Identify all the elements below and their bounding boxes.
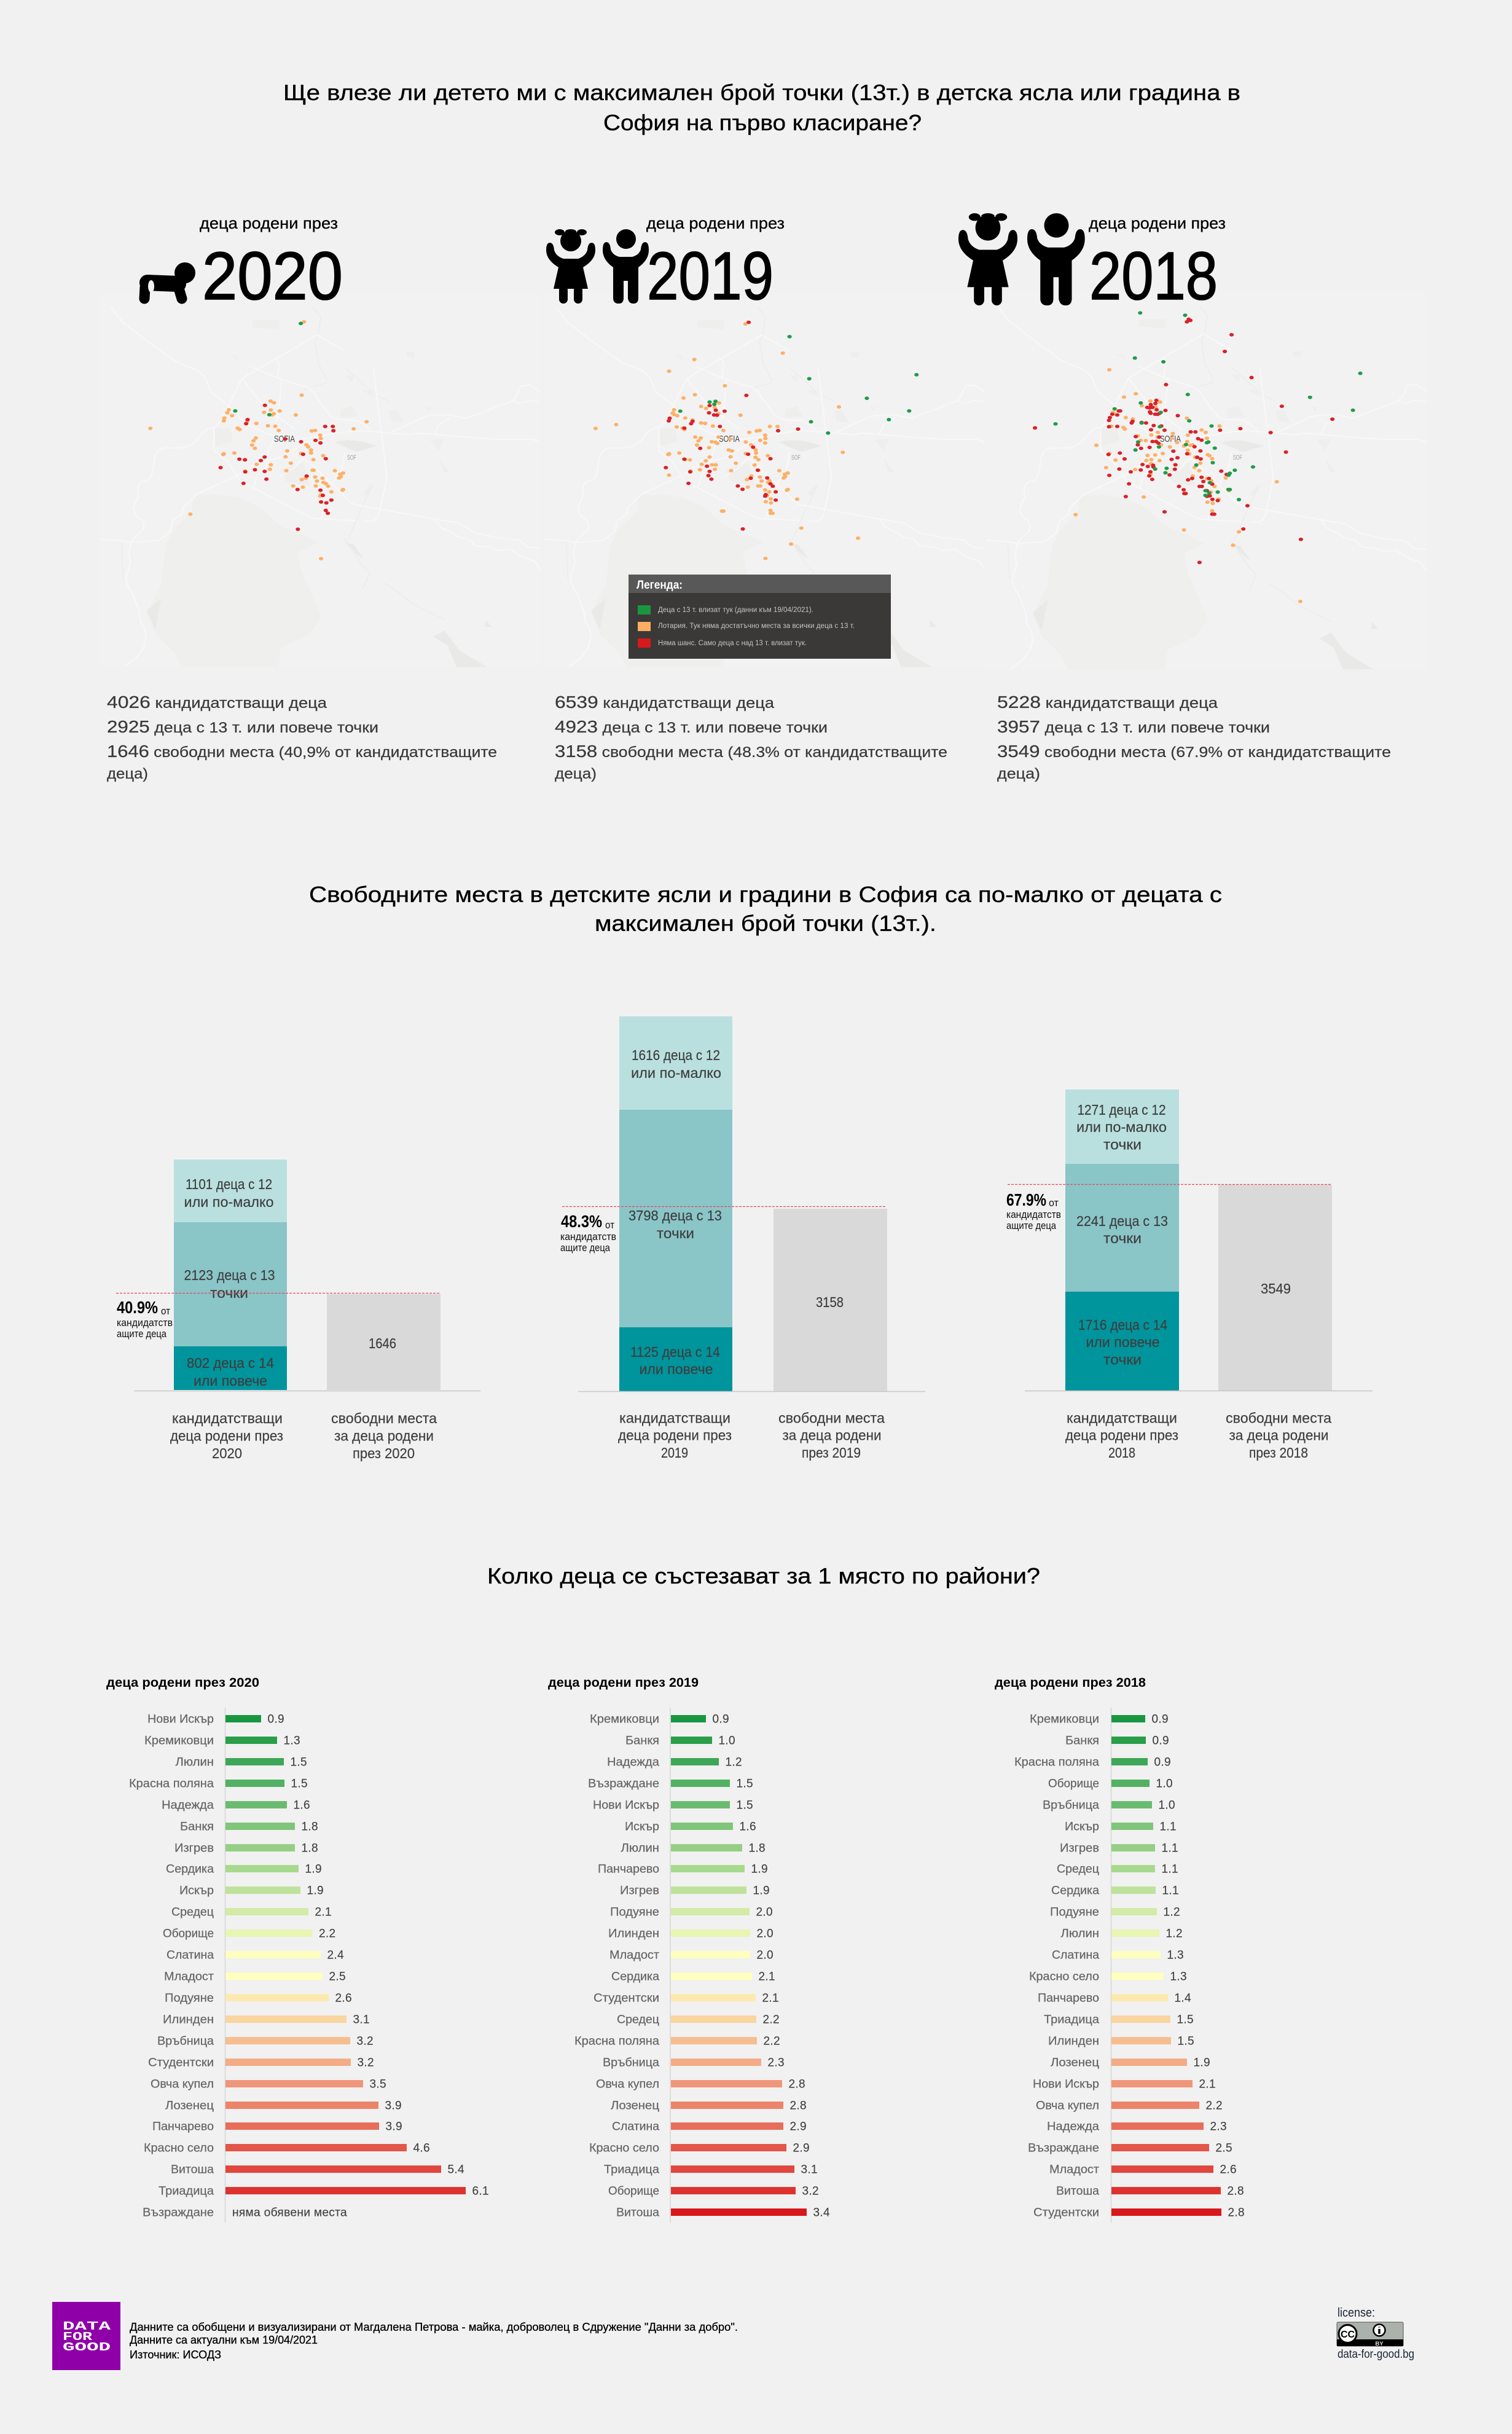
values 2020: 4.6 [413, 2142, 430, 2154]
stats 2019: 3158 свободни места (48.3% от кандидатстващите [555, 742, 947, 761]
district labels 2020: Слатина [166, 1949, 214, 1961]
axis labels 2020: за деца родени [334, 1428, 434, 1444]
values 2018: 1.0 [1156, 1777, 1173, 1791]
district labels 2018: Банкя [1065, 1734, 1099, 1748]
map label SOF 2019: SOF [791, 454, 801, 461]
stacked bar 2018 [1065, 1089, 1179, 1391]
district labels 2020: Витоша [171, 2163, 214, 2177]
legend: Няма шанс. Само деца с над 13 т. влизат тук. [658, 640, 807, 647]
district labels 2020: Оборище [163, 1927, 214, 1941]
stacked bar 2018: 1271 деца с 12 [1078, 1102, 1166, 1118]
values 2018 [1151, 1713, 1245, 2220]
district labels 2020: Панчарево [152, 2120, 214, 2134]
district labels 2018: Надежда [1047, 2120, 1099, 2134]
values 2018: 1.1 [1161, 1863, 1178, 1875]
values 2020: 1.6 [294, 1799, 310, 1812]
values 2020: 3.9 [385, 2099, 402, 2113]
stacked bar 2019: или по-малко [631, 1065, 721, 1081]
stats 2020: 4026 кандидатстващи деца [107, 693, 327, 712]
stacked bar 2019: точки [657, 1225, 694, 1241]
district labels 2018: Оборище [1048, 1777, 1099, 1791]
chart: applicants vs free places 2019 [560, 1016, 925, 1461]
values 2020: 1.8 [301, 1820, 318, 1834]
district labels 2020: Сердика [166, 1863, 214, 1875]
values 2019: 2.3 [768, 2056, 785, 2070]
values 2020: 1.9 [305, 1863, 322, 1875]
stacked bar 2018: 1716 деца с 14 [1078, 1317, 1167, 1333]
icon: boy 2018 [1027, 213, 1085, 305]
stacked bar 2020: точки [210, 1285, 248, 1301]
panel: map children born 2018 [986, 292, 1427, 669]
district labels 2019: Оборище [608, 2185, 659, 2197]
values 2018: 1.3 [1167, 1949, 1184, 1961]
district labels 2018: Възраждане [1028, 2142, 1099, 2154]
axis labels 2020 [170, 1410, 437, 1461]
values 2018: 1.2 [1164, 1906, 1180, 1918]
free places bar 2018: 3549 [1261, 1281, 1291, 1297]
legend: Лотария. Тук няма достатъчно места за всички деца с 13 т. [658, 622, 855, 630]
bars 2018 [1111, 1715, 1221, 2216]
values 2019: 3.1 [801, 2163, 818, 2177]
stats 2019 [555, 693, 947, 782]
stacked bar 2018: или повече [1086, 1334, 1160, 1350]
percent callout 2020: ащите деца [117, 1328, 166, 1340]
values 2018: 1.9 [1193, 2056, 1210, 2070]
stacked bar 2020 [174, 1160, 287, 1390]
values 2020: 1.5 [291, 1777, 308, 1791]
icon: crawling baby [144, 262, 195, 299]
district labels 2020: Подуяне [165, 1992, 214, 2004]
stats 2020 [107, 693, 497, 782]
district labels 2018: Люлин [1060, 1927, 1099, 1941]
percent callout 2018 [1006, 1190, 1061, 1231]
axis labels 2019: свободни места [778, 1410, 885, 1426]
district labels 2018: Изгрев [1060, 1842, 1099, 1855]
values 2020: 2.5 [329, 1970, 346, 1984]
values 2019: 2.8 [790, 2099, 807, 2113]
district labels 2019: Люлин [621, 1842, 659, 1855]
footer credits [130, 2321, 738, 2361]
district labels 2019: Слатина [612, 2120, 659, 2134]
axis labels 2018: деца родени през [1065, 1427, 1178, 1443]
axis labels 2019 [618, 1410, 885, 1461]
values 2018: 1.5 [1177, 2035, 1194, 2047]
district labels 2020: Връбница [157, 2035, 214, 2047]
values 2018: 1.2 [1166, 1927, 1183, 1941]
map label Sofia 2018: SOFIA [1160, 434, 1181, 444]
values 2018: 1.5 [1177, 2013, 1194, 2027]
percent callout 2019: от [605, 1219, 614, 1231]
district labels 2020 [129, 1713, 214, 2220]
axis labels 2020: деца родени през [170, 1428, 283, 1444]
bars 2020 [225, 1715, 466, 2194]
footer credits: Източник: ИСОДЗ [130, 2349, 221, 2361]
year heading 2020: деца родени през [200, 214, 338, 232]
district labels 2019: Изгрев [620, 1884, 659, 1898]
logo: data for good [52, 2302, 120, 2370]
values 2019 [713, 1713, 830, 2220]
map label Sofia 2020: SOFIA [274, 434, 295, 444]
district labels 2019: Искър [625, 1820, 659, 1834]
district labels 2018 [1014, 1713, 1099, 2220]
values 2019: 1.6 [740, 1820, 756, 1834]
free places bar 2019: 3158 [816, 1294, 844, 1310]
values 2020: 3.2 [356, 2035, 374, 2047]
license block: data-for-good.bg [1338, 2348, 1414, 2361]
section title: free places [309, 882, 1222, 936]
icon: girl 2018 [958, 213, 1017, 305]
axis labels 2020: свободни места [331, 1410, 437, 1426]
district labels 2018: Сердика [1051, 1884, 1099, 1898]
values 2019: 1.0 [719, 1734, 735, 1748]
district labels 2018: Искър [1065, 1820, 1099, 1834]
values 2019: 1.5 [736, 1777, 753, 1791]
district labels 2018: Красно село [1029, 1970, 1099, 1984]
axis labels 2019: за деца родени [783, 1427, 881, 1443]
district labels 2018: Средец [1057, 1863, 1099, 1875]
axis labels 2020: кандидатстващи [172, 1410, 283, 1426]
stacked bar 2018: или по-малко [1076, 1119, 1167, 1135]
district labels 2019: Сердика [611, 1970, 659, 1984]
district labels 2020: Люлин [176, 1756, 214, 1769]
stacked bar 2019: 1125 деца с 14 [630, 1344, 720, 1360]
district labels 2019: Възраждане [588, 1777, 659, 1791]
values 2020: 2.4 [327, 1949, 344, 1961]
district labels 2020: Младост [164, 1970, 214, 1984]
district labels 2020: Красно село [144, 2142, 214, 2154]
stacked bar 2019: 3798 деца с 13 [629, 1207, 722, 1223]
stats 2018: 3549 свободни места (67.9% от кандидатстващите [997, 742, 1391, 761]
district labels 2019: Надежда [607, 1756, 659, 1769]
license block: license: [1338, 2306, 1375, 2320]
values 2020: 2.6 [335, 1992, 352, 2004]
bars 2019 [671, 1715, 807, 2216]
values 2019: 2.2 [763, 2013, 780, 2027]
district labels 2018: Студентски [1033, 2206, 1099, 2220]
year heading 2018: деца родени през [1089, 214, 1226, 232]
values 2019: 3.2 [802, 2185, 819, 2197]
values 2020: 1.8 [301, 1842, 318, 1855]
year heading 2019: деца родени през [646, 214, 785, 232]
percent callout 2019: кандидатств [560, 1231, 616, 1243]
district labels 2019: Витоша [616, 2206, 659, 2220]
percent callout 2019: 48.3% [561, 1212, 602, 1231]
values 2020: 1.9 [307, 1884, 324, 1898]
values 2018: 1.0 [1159, 1799, 1175, 1812]
values 2018: 0.9 [1154, 1756, 1171, 1769]
icon: CC BY badge: CC [1341, 2330, 1355, 2340]
stats 2019: деца) [555, 766, 597, 782]
panel: map children born 2019 [544, 293, 985, 667]
section title: children per place: Колко деца се състезават за 1 място по райони? [487, 1563, 1040, 1588]
district labels 2018: Панчарево [1038, 1992, 1099, 2004]
logo: data for good: FOR [63, 2330, 93, 2344]
year heading 2018 [1089, 214, 1226, 314]
stats 2018 [997, 693, 1391, 782]
values 2020: 3.9 [386, 2120, 402, 2134]
values 2018: 2.6 [1220, 2163, 1237, 2177]
percent callout 2018: 67.9% [1006, 1190, 1046, 1209]
stacked bar 2019 [619, 1016, 732, 1391]
stats 2018: 3957 деца с 13 т. или повече точки [997, 717, 1270, 736]
footer credits: Данните са актуални към 19/04/2021 [130, 2334, 318, 2346]
map dots 2019 [595, 322, 917, 559]
stacked bar 2018: точки [1103, 1230, 1142, 1246]
chart heading 2019: деца родени през 2019 [548, 1676, 699, 1690]
percent callout 2020: кандидатств [117, 1317, 173, 1329]
percent callout 2019: ащите деца [560, 1242, 610, 1254]
district labels 2018: Красна поляна [1014, 1756, 1099, 1769]
values 2020: 1.5 [290, 1756, 307, 1769]
free places bar 2020: 1646 [369, 1335, 396, 1351]
district labels 2018: Лозенец [1051, 2056, 1099, 2070]
bar chart: districts 2018 [995, 1676, 1245, 2223]
district labels 2020: Илинден [163, 2013, 214, 2027]
icon: girl 2019 [546, 229, 595, 304]
stats 2019: 4923 деца с 13 т. или повече точки [555, 717, 828, 736]
values 2020: 2.1 [315, 1906, 332, 1918]
values 2019: 2.1 [758, 1970, 775, 1984]
axis labels 2018: за деца родени [1229, 1427, 1328, 1443]
bar chart: districts 2019 [548, 1676, 830, 2223]
district labels 2018: Младост [1049, 2163, 1099, 2177]
district labels 2018: Илинден [1048, 2035, 1099, 2047]
district labels 2019: Лозенец [611, 2099, 659, 2113]
district labels 2018: Триадица [1044, 2013, 1099, 2027]
map base 2018 [986, 292, 1427, 669]
district labels 2018: Нови Искър [1033, 2078, 1099, 2090]
district labels 2019: Овча купел [596, 2078, 659, 2090]
values 2020: 3.2 [358, 2056, 374, 2070]
values 2018: 1.4 [1175, 1992, 1191, 2004]
map label SOF 2020: SOF [347, 454, 356, 461]
values 2019: 0.9 [713, 1713, 729, 1725]
values 2019: 2.0 [757, 1927, 774, 1941]
percent callout 2020 [117, 1298, 173, 1340]
values 2020: 2.2 [319, 1927, 335, 1941]
values 2020: 3.1 [353, 2013, 370, 2027]
district labels 2020: Кремиковци [144, 1734, 214, 1748]
percent callout 2018: кандидатств [1006, 1209, 1061, 1220]
free places bar 2018 [1218, 1185, 1332, 1391]
values 2019: 2.0 [756, 1906, 773, 1918]
district labels 2020: Средец [171, 1906, 214, 1918]
district labels 2019: Красна поляна [574, 2035, 659, 2047]
stacked bar 2019: или повече [639, 1361, 713, 1377]
icon: CC BY badge: BY [1375, 2341, 1384, 2347]
values 2020: 0.9 [268, 1713, 284, 1725]
district labels 2019 [574, 1713, 659, 2220]
axis labels 2018: през 2018 [1249, 1445, 1308, 1461]
stacked bar 2020: 2123 деца с 13 [184, 1267, 275, 1283]
values 2018: 2.5 [1215, 2142, 1232, 2154]
district labels 2020: Надежда [162, 1799, 214, 1812]
legend: Деца с 13 т. влизат тук (данни към 19/04/2021). [658, 607, 813, 614]
values 2018: 2.8 [1228, 2206, 1245, 2220]
percent callout 2020: 40.9% [117, 1298, 158, 1317]
main title [283, 80, 1240, 135]
free places bar 2019 [774, 1209, 887, 1391]
values 2020: 3.5 [370, 2078, 386, 2090]
footer credits: Данните са обобщени и визуализирани от Магдалена Петрова - майка, доброволец в Сдружение "Данни за добро". [130, 2321, 738, 2333]
map label SOF 2018: SOF [1233, 454, 1242, 461]
axis labels 2019: деца родени през [618, 1427, 732, 1443]
stacked bar 2020: 1101 деца с 12 [186, 1176, 272, 1192]
values 2018: 1.1 [1162, 1884, 1179, 1898]
stats 2019: 6539 кандидатстващи деца [555, 693, 775, 712]
values 2019: 2.2 [763, 2035, 780, 2047]
district labels 2020: Банкя [180, 1820, 214, 1834]
values 2018: 1.3 [1170, 1970, 1187, 1984]
district labels 2020: Изгрев [174, 1842, 214, 1855]
values 2019: 1.8 [748, 1842, 766, 1855]
legend [629, 575, 891, 659]
axis labels 2018: свободни места [1226, 1410, 1331, 1426]
district labels 2019: Кремиковци [590, 1713, 659, 1725]
stats 2020: деца) [107, 766, 148, 782]
axis labels 2019: 2019 [661, 1445, 688, 1461]
stacked bar 2020: или по-малко [184, 1194, 274, 1210]
values 2020: 6.1 [472, 2185, 489, 2197]
section title: free places: Свободните места в детските ясли и градини в София са по-малко от децата с [309, 882, 1222, 907]
values 2018: 0.9 [1153, 1734, 1169, 1748]
values 2019: 2.9 [790, 2120, 807, 2134]
district labels 2018: Овча купел [1036, 2099, 1099, 2113]
stats 2020: 1646 свободни места (40,9% от кандидатстващите [107, 742, 497, 761]
panel: map children born 2020 [100, 293, 540, 667]
stats 2018: деца) [997, 766, 1040, 782]
axis labels 2018: кандидатстващи [1067, 1410, 1177, 1426]
axis labels 2019: през 2019 [802, 1445, 861, 1461]
map label Sofia 2019: SOFIA [719, 434, 740, 444]
year heading 2018: 2018 [1089, 238, 1218, 314]
main title: Ще влезе ли детето ми с максимален брой точки (13т.) в детска ясла или градина в [283, 80, 1240, 105]
district labels 2019: Панчарево [598, 1863, 659, 1875]
stacked bar 2020: или повече [194, 1373, 267, 1389]
district labels 2020: Лозенец [165, 2099, 214, 2113]
district labels 2020: Възраждане [143, 2206, 214, 2220]
axis labels 2018 [1065, 1410, 1331, 1461]
values 2020: няма обявени места [232, 2206, 347, 2220]
district labels 2018: Кремиковци [1030, 1713, 1099, 1725]
district labels 2020: Овча купел [151, 2078, 214, 2090]
map base 2020 [100, 293, 540, 667]
values 2018: 2.3 [1210, 2120, 1227, 2134]
values 2019: 1.2 [725, 1756, 742, 1769]
year heading 2019: 2019 [647, 238, 774, 314]
district labels 2019: Подуяне [610, 1906, 659, 1918]
district labels 2018: Връбница [1043, 1799, 1099, 1812]
axis labels 2020: 2020 [212, 1445, 242, 1461]
license block [1337, 2306, 1414, 2361]
district labels 2018: Витоша [1056, 2185, 1099, 2197]
free places bar 2020 [327, 1294, 441, 1390]
values 2020: 5.4 [447, 2163, 464, 2177]
district labels 2020: Красна поляна [129, 1777, 214, 1791]
icon: CC BY badge [1337, 2322, 1403, 2347]
percent callout 2018: от [1049, 1197, 1059, 1209]
stats 2018: 5228 кандидатстващи деца [997, 693, 1218, 712]
values 2018: 0.9 [1151, 1713, 1169, 1725]
chart heading 2018: деца родени през 2018 [995, 1676, 1146, 1690]
icon: boy 2019 [603, 229, 649, 304]
section title: free places: максимален брой точки (13т.). [595, 911, 936, 936]
values 2019: 1.5 [736, 1799, 753, 1812]
percent callout 2020: от [161, 1305, 170, 1317]
district labels 2019: Нови Искър [593, 1799, 659, 1812]
values 2018: 2.1 [1199, 2078, 1216, 2090]
values 2019: 2.0 [757, 1949, 774, 1961]
district labels 2019: Банкя [625, 1734, 659, 1748]
district labels 2019: Студентски [593, 1992, 659, 2004]
map dots 2018 [1035, 313, 1360, 602]
values 2019: 1.9 [753, 1884, 770, 1898]
legend: Легенда: [637, 579, 683, 592]
stats 2020: 2925 деца с 13 т. или повече точки [107, 717, 378, 736]
values 2019: 2.9 [793, 2142, 810, 2154]
district labels 2019: Красно село [589, 2142, 659, 2154]
axis labels 2020: през 2020 [353, 1445, 415, 1461]
district labels 2019: Средец [617, 2013, 659, 2027]
district labels 2020: Студентски [148, 2056, 214, 2070]
district labels 2019: Младост [609, 1949, 659, 1961]
bar chart: districts 2020 [106, 1676, 489, 2223]
district labels 2019: Илинден [608, 1927, 659, 1941]
chart: applicants vs free places 2020 [116, 1160, 480, 1461]
values 2020 [232, 1713, 489, 2220]
district labels 2018: Подуяне [1050, 1906, 1099, 1918]
district labels 2019: Връбница [603, 2056, 659, 2070]
district labels 2020: Искър [179, 1884, 214, 1898]
chart heading 2020: деца родени през 2020 [106, 1676, 259, 1690]
axis labels 2019: кандидатстващи [619, 1410, 731, 1426]
district labels 2020: Нови Искър [147, 1713, 214, 1725]
district labels 2020: Триадица [159, 2185, 214, 2197]
main title: София на първо класиране? [603, 110, 922, 135]
map base 2019 [544, 293, 985, 667]
values 2020: 1.3 [284, 1734, 300, 1748]
axis labels 2018: 2018 [1108, 1445, 1135, 1461]
values 2019: 2.1 [762, 1992, 779, 2004]
stacked bar 2019: 1616 деца с 12 [632, 1047, 720, 1063]
values 2019: 3.4 [813, 2206, 830, 2220]
values 2018: 2.8 [1228, 2185, 1244, 2197]
logo: data for good: DATA [63, 2320, 111, 2333]
percent callout 2018: ащите деца [1006, 1220, 1056, 1231]
year heading 2020: 2020 [202, 238, 343, 314]
values 2019: 2.8 [789, 2078, 805, 2090]
percent callout 2019 [560, 1212, 616, 1254]
stacked bar 2018: 2241 деца с 13 [1076, 1213, 1168, 1229]
district labels 2019: Триадица [604, 2163, 659, 2177]
map dots 2020 [151, 322, 367, 559]
logo: data for good: GOOD [63, 2341, 111, 2354]
values 2018: 1.1 [1160, 1820, 1177, 1834]
district labels 2018: Слатина [1052, 1949, 1099, 1961]
stacked bar 2020: 802 деца с 14 [187, 1355, 274, 1371]
values 2018: 2.2 [1205, 2099, 1223, 2113]
stacked bar 2018: точки [1103, 1352, 1142, 1368]
stacked bar 2018: точки [1103, 1137, 1142, 1153]
values 2018: 1.1 [1161, 1842, 1178, 1855]
values 2019: 1.9 [751, 1863, 768, 1875]
chart: applicants vs free places 2018 [1006, 1089, 1373, 1461]
